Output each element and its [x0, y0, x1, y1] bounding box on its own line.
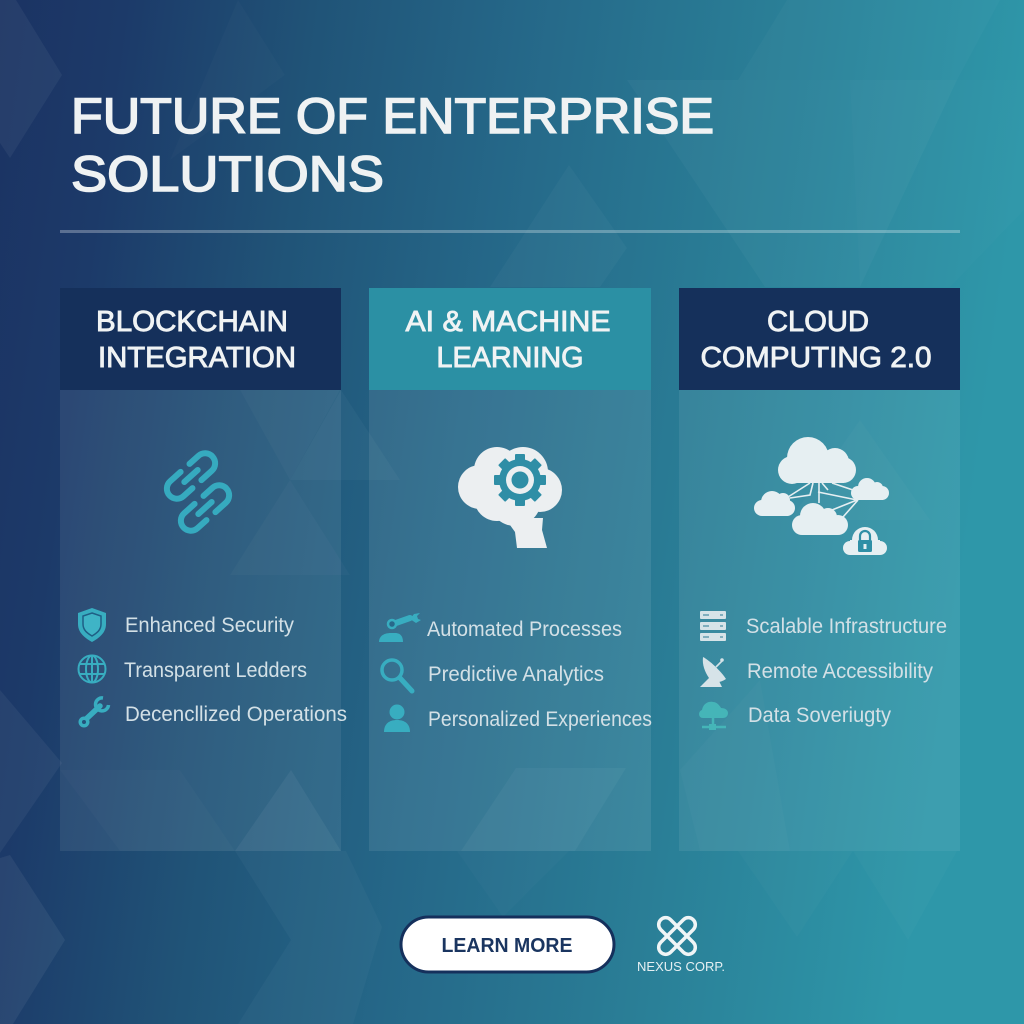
- list item: Decencllized Operations: [78, 698, 347, 728]
- icon: chain links: [163, 449, 233, 535]
- icon: nexus knot: [656, 915, 698, 957]
- large cloud: [778, 437, 856, 484]
- heading: cloud computing 2.0: CLOUD: [767, 306, 869, 338]
- list item: Scalable Infrastructure: Scalable Infrastructure: [746, 615, 947, 638]
- list item: Transparent Ledders: Transparent Ledders: [124, 659, 307, 682]
- list item: Decencllized Operations: Decencllized Operations: [125, 703, 347, 726]
- list item: Scalable Infrastructure: [700, 611, 947, 641]
- panel: blockchain integration: [60, 288, 347, 851]
- list item: Enhanced Security: Enhanced Security: [125, 614, 294, 637]
- icon: brain with gear: [458, 447, 562, 548]
- list item: Automated Processes: [379, 613, 622, 642]
- heading: cloud computing 2.0: COMPUTING 2.0: [700, 342, 932, 374]
- panel: cloud computing 2.0: [679, 288, 960, 851]
- list item: Data Soveriugty: Data Soveriugty: [748, 704, 891, 727]
- list item: Enhanced Security: [78, 608, 294, 642]
- title: FUTURE OF ENTERPRISE: [71, 88, 714, 144]
- right cloud: [851, 478, 889, 500]
- list item: Remote Accessibility: [700, 657, 933, 687]
- logo: nexus corp: [637, 915, 725, 974]
- button: learn more: [401, 917, 614, 972]
- title: SOLUTIONS: [71, 146, 384, 202]
- lock cloud: [843, 527, 887, 555]
- heading: blockchain integration: BLOCKCHAIN: [96, 306, 288, 338]
- left cloud: [754, 491, 795, 516]
- heading: AI and machine learning: [369, 288, 651, 390]
- list item: Remote Accessibility: Remote Accessibility: [747, 660, 933, 683]
- icon: connected clouds with lock: [754, 437, 889, 555]
- list item: Predictive Analytics: [382, 660, 604, 691]
- middle cloud: [792, 503, 848, 535]
- list item: Predictive Analytics: Predictive Analytics: [428, 663, 604, 686]
- list item: Transparent Ledders: [78, 655, 307, 683]
- button: learn more: LEARN MORE: [442, 935, 572, 957]
- heading: AI and machine learning: LEARNING: [436, 342, 584, 374]
- list item: Personalized Experiences: Personalized Experiences: [428, 708, 652, 731]
- list item: Automated Processes: Automated Processes: [427, 618, 622, 641]
- heading: cloud computing 2.0: [679, 288, 960, 390]
- heading: AI and machine learning: AI & MACHINE: [406, 306, 610, 338]
- title: [71, 88, 714, 202]
- list item: Data Soveriugty: [699, 702, 891, 730]
- panel: AI and machine learning: [369, 288, 652, 851]
- heading: blockchain integration: [60, 288, 341, 390]
- list item: Personalized Experiences: [384, 704, 652, 732]
- logo: nexus corp: NEXUS CORP.: [637, 960, 725, 974]
- heading: blockchain integration: INTEGRATION: [98, 342, 296, 374]
